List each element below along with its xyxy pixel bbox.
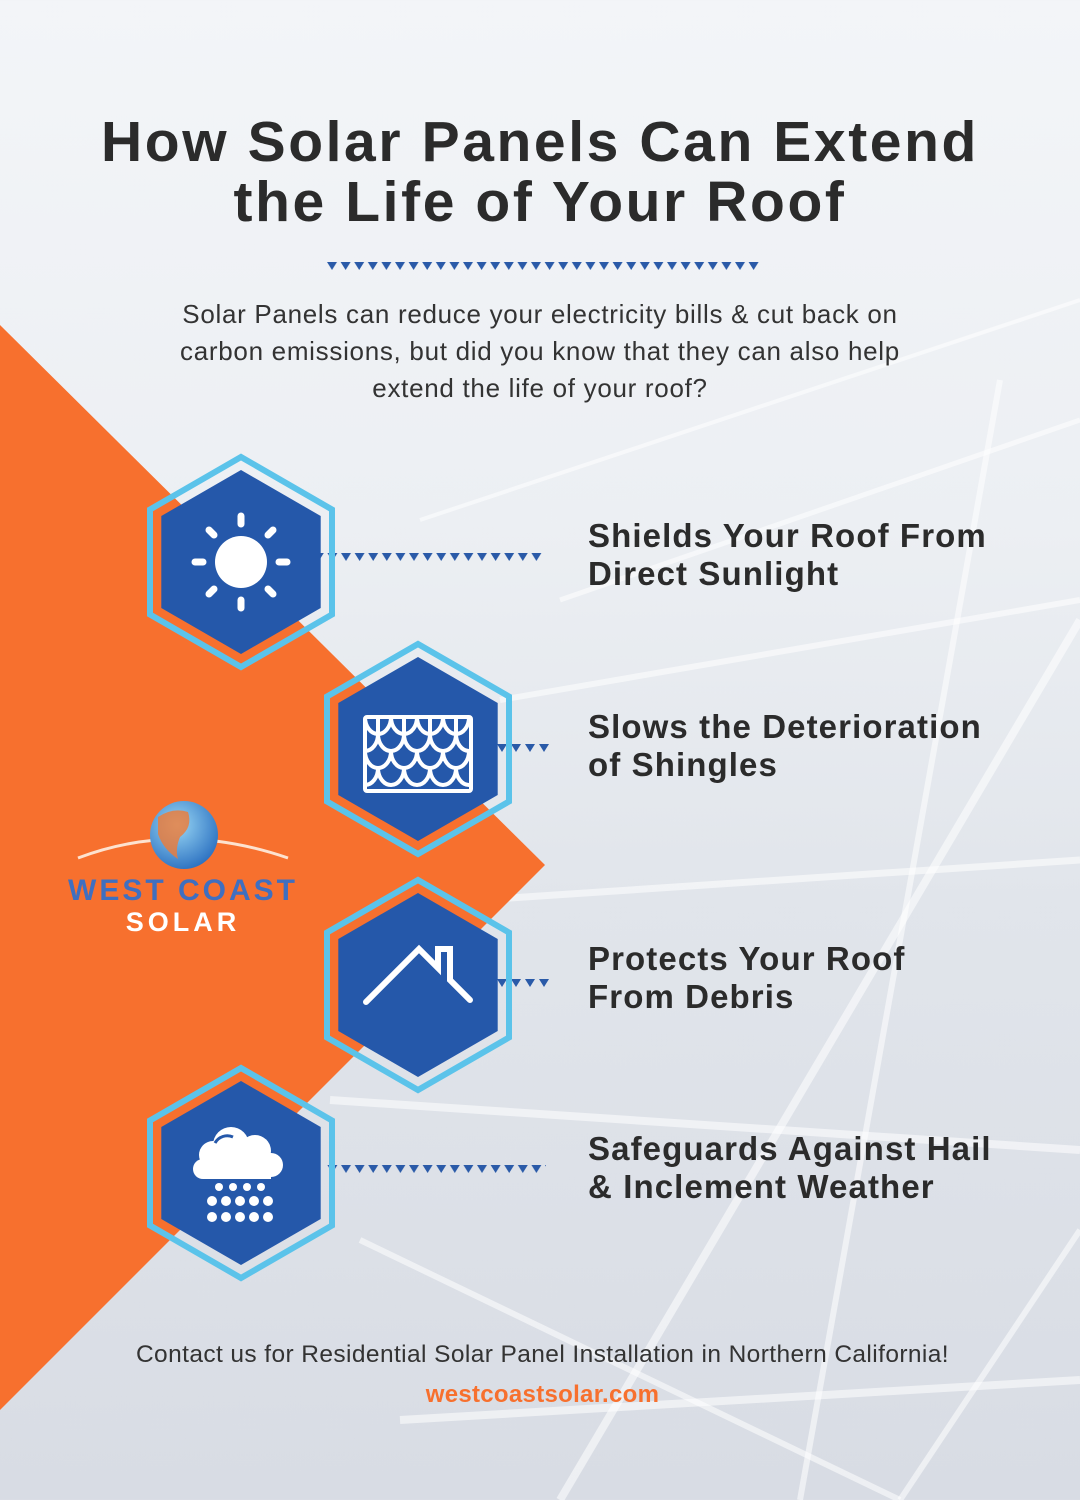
title: How Solar Panels Can Extend xyxy=(101,110,979,174)
heading 4 xyxy=(588,1130,992,1205)
heading 4: Safeguards Against Hail xyxy=(588,1130,992,1167)
title divider xyxy=(327,262,759,270)
heading 2 xyxy=(588,708,982,783)
heading 3: Protects Your Roof xyxy=(588,940,905,977)
logo: West Coast Solar xyxy=(68,801,298,937)
heading 1 xyxy=(588,517,987,592)
intro text: extend the life of your roof? xyxy=(372,373,708,403)
heading 3: From Debris xyxy=(588,978,794,1015)
heading 2: Slows the Deterioration xyxy=(588,708,982,745)
title: the Life of Your Roof xyxy=(234,170,846,234)
intro text: Solar Panels can reduce your electricity bills & cut back on xyxy=(182,299,898,329)
heading 3 xyxy=(588,940,905,1015)
heading 4: & Inclement Weather xyxy=(588,1168,935,1205)
icon: hail cloud hexagon xyxy=(147,1064,335,1282)
footer url: westcoastsolar.com xyxy=(426,1381,659,1408)
logo: West Coast Solar: WEST COAST xyxy=(68,874,298,907)
footer contact: Contact us for Residential Solar Panel Installation in Northern California! xyxy=(136,1341,949,1368)
icon: house hexagon xyxy=(324,876,512,1094)
icon: sun hexagon xyxy=(147,454,335,670)
heading 1: Direct Sunlight xyxy=(588,555,839,592)
intro text xyxy=(180,299,900,403)
title xyxy=(101,110,979,234)
heading 1: Shields Your Roof From xyxy=(588,517,987,554)
logo: West Coast Solar: SOLAR xyxy=(126,907,240,937)
icon: shingles hexagon xyxy=(324,640,512,858)
intro text: carbon emissions, but did you know that they can also help xyxy=(180,336,900,366)
heading 2: of Shingles xyxy=(588,746,778,783)
